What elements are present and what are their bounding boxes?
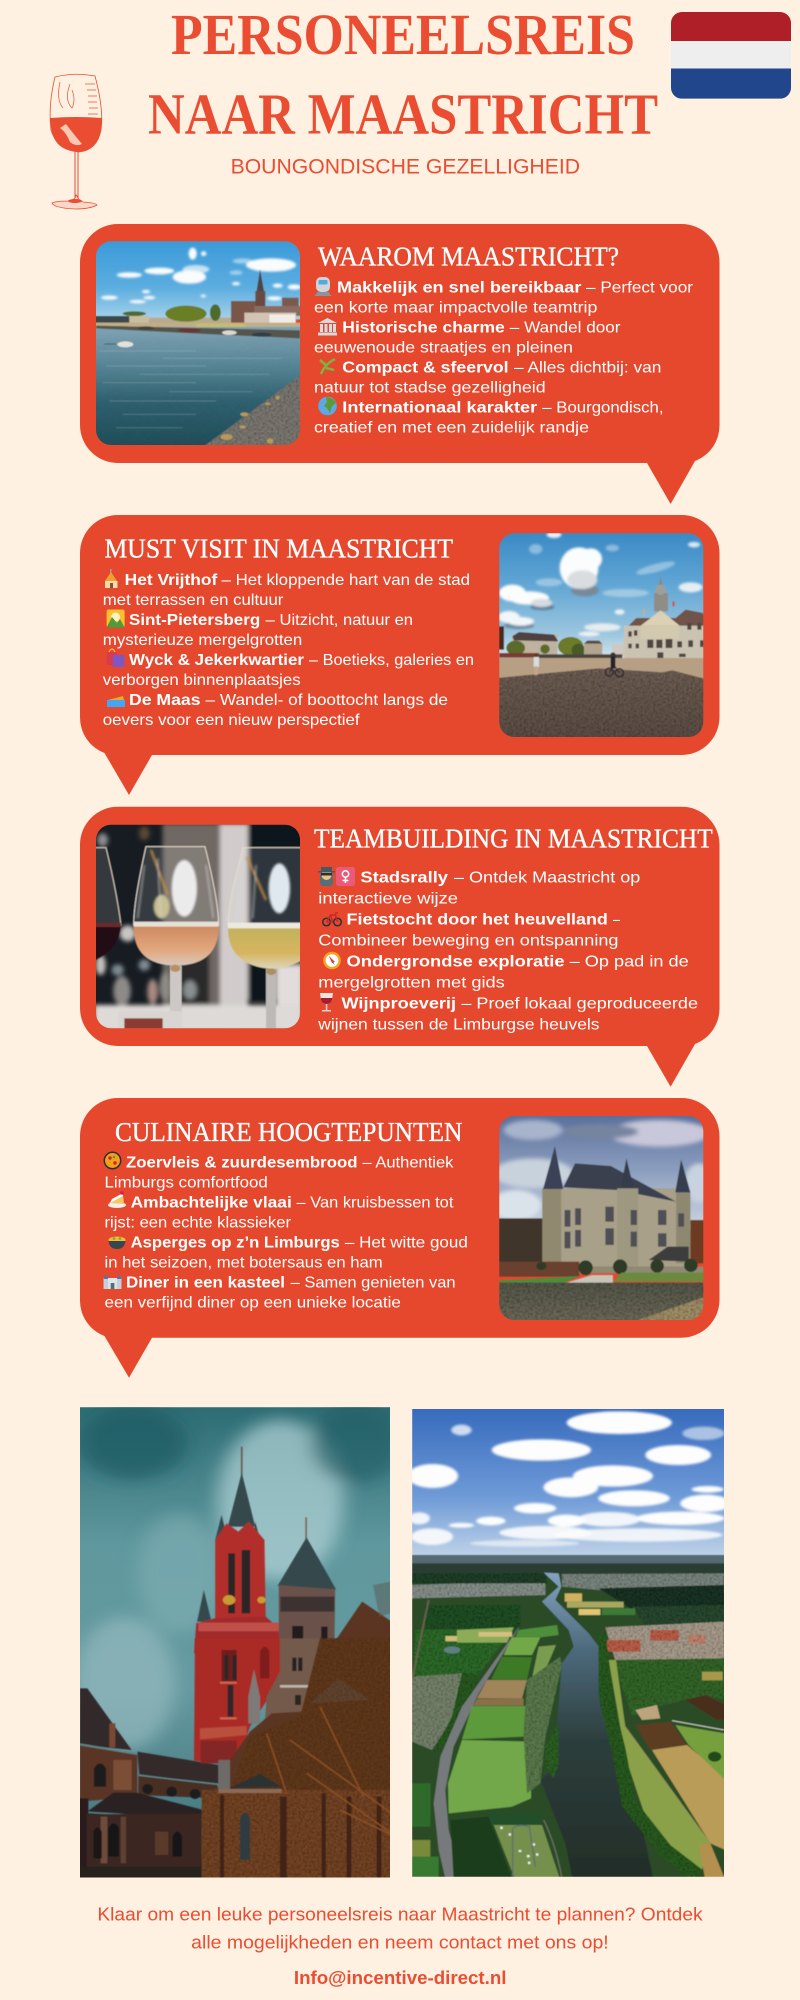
list: Makkelijk en snel bereikbaar: [337, 280, 581, 297]
panel: must visit: [80, 515, 719, 795]
icon: herb: [320, 359, 335, 374]
list: – Het witte goud: [345, 1234, 468, 1251]
icon: cake slice: [108, 1191, 126, 1208]
list: – Samen genieten van: [291, 1274, 456, 1291]
list: –: [613, 911, 620, 928]
header: [50, 2, 791, 209]
list: natuur tot stadse gezelligheid: [314, 380, 546, 397]
red tower upper: [194, 1447, 280, 1653]
list: Historische charme: [342, 320, 505, 337]
photo: wine glasses: [94, 823, 303, 1032]
brick tower upper: [278, 1517, 336, 1653]
list: Het Vrijthof: [125, 572, 218, 589]
call to action: Klaar om een leuke personeelsreis naar Maastricht te plannen? Ontdek: [97, 1905, 704, 1925]
list: – Perfect voor: [586, 280, 694, 297]
icon: train: [314, 277, 332, 296]
icon: shopping bags: [107, 649, 124, 667]
list: De Maas: [129, 692, 201, 709]
panel: waarom maastricht: [80, 224, 720, 504]
list: Wijnproeverij: [342, 996, 456, 1013]
list: Stadsrally: [360, 870, 448, 887]
list: in het seizoen, met botersaus en ham: [104, 1254, 383, 1271]
list: – Wandel- of boottocht langs de: [206, 692, 448, 709]
footer: [97, 1905, 704, 1988]
list: interactieve wijze: [318, 891, 458, 908]
list: – Authentiek: [362, 1154, 454, 1171]
list: – Uitzicht, natuur en: [266, 612, 413, 629]
speech bubble: [80, 224, 720, 504]
list: [317, 867, 698, 1034]
list: – Alles dichtbij: van: [514, 360, 661, 377]
nave: [202, 1638, 392, 1878]
list: oevers voor een nieuw perspectief: [103, 712, 360, 729]
icon: dutch flag: [671, 12, 791, 99]
list: een korte maar impactvolle teamtrip: [314, 300, 598, 317]
speech bubble: [80, 515, 719, 795]
list: – Het kloppende hart van de stad: [222, 572, 470, 589]
title line 1: PERSONEELSREIS: [171, 2, 635, 67]
photo: aerial view of the maas: [407, 1403, 731, 1882]
speech bubble: [80, 1098, 720, 1378]
list: – Bourgondisch,: [542, 400, 664, 417]
icon: wine glass: [50, 74, 102, 209]
list: Limburgs comfortfood: [104, 1174, 268, 1191]
list: mysterieuze mergelgrotten: [103, 632, 302, 649]
heading: MUST VISIT IN MAASTRICHT: [104, 533, 453, 564]
list: – Van kruisbessen tot: [296, 1194, 454, 1211]
subtitle: BOUNGONDISCHE GEZELLIGHEID: [231, 156, 580, 179]
list: Wyck & Jekerkwartier: [129, 652, 304, 669]
icon: paella: [104, 1152, 121, 1169]
list: [104, 1152, 468, 1311]
list: Zoervleis & zuurdesembrood: [126, 1154, 358, 1171]
list: verborgen binnenplaatsjes: [103, 672, 301, 689]
gable upper: [327, 1602, 394, 1653]
list: met terrassen en cultuur: [103, 592, 284, 609]
icon: castle: [104, 1274, 121, 1289]
icon: bowl: [108, 1236, 126, 1249]
list: Ambachtelijke vlaai: [131, 1194, 292, 1211]
panel: teambuilding: [80, 807, 720, 1087]
list: Fietstocht door het heuvelland: [346, 911, 608, 928]
icon: sunrise over mountains: [107, 610, 125, 628]
contact e-mail: Info@incentive-direct.nl: [294, 1967, 506, 1988]
list: mergelgrotten met gids: [318, 975, 505, 992]
speech bubble: [80, 807, 720, 1087]
list: Combineer beweging en ontspanning: [318, 933, 618, 950]
heading: CULINAIRE HOOGTEPUNTEN: [115, 1116, 462, 1147]
panel: culinaire hoogtepunten: [80, 1098, 720, 1378]
list: Internationaal karakter: [342, 400, 537, 417]
list: Diner in een kasteel: [126, 1274, 285, 1291]
icon: detective and female sign: [318, 867, 355, 886]
gable and trees: [214, 1638, 390, 1790]
icon: wine glass small: [320, 993, 333, 1012]
heading: TEAMBUILDING IN MAASTRICHT: [314, 823, 713, 854]
icon: compass: [323, 952, 341, 969]
icon: boat: [107, 696, 125, 707]
list: Compact & sfeervol: [342, 360, 509, 377]
list: Sint-Pietersberg: [129, 612, 260, 629]
list: – Proef lokaal geproduceerde: [461, 996, 698, 1013]
photo: maas river with church: [94, 239, 303, 447]
list: – Op pad in de: [570, 954, 689, 971]
brick tower lower: [265, 1638, 321, 1720]
list: eeuwenoude straatjes en pleinen: [314, 340, 573, 357]
list: Asperges op z’n Limburgs: [131, 1234, 340, 1251]
pinnacle: [248, 1669, 260, 1723]
list: – Ontdek Maastricht op: [454, 870, 640, 887]
icon: classical building: [318, 318, 337, 336]
photo: vrijthof square and town hall: [497, 531, 706, 739]
title line 2: NAAR MAASTRICHT: [148, 81, 658, 146]
list: – Boetieks, galeries en: [309, 652, 474, 669]
list: Ondergrondse exploratie: [346, 954, 565, 971]
list: creatief en met een zuidelijk randje: [314, 420, 589, 437]
left church: [78, 1688, 218, 1882]
list: – Wandel door: [510, 320, 621, 337]
icon: church: [105, 569, 118, 588]
icon: globe: [318, 397, 337, 415]
footer: alle mogelijkheden en neem contact met ons op!: [191, 1932, 609, 1952]
red tower lower: [194, 1638, 280, 1765]
photo: castle: [499, 1116, 704, 1320]
icon: bicycle: [323, 913, 341, 926]
heading: WAAROM MAASTRICHT?: [318, 241, 619, 272]
list: wijnen tussen de Limburgse heuvels: [317, 1017, 600, 1034]
list: [103, 569, 474, 729]
list: [314, 277, 694, 437]
photo: sint-janskerk and sint-servaas basilica: [80, 1407, 390, 1878]
list: rijst: een echte klassieker: [104, 1214, 292, 1231]
list: een verfijnd diner op een unieke locatie: [104, 1294, 401, 1311]
